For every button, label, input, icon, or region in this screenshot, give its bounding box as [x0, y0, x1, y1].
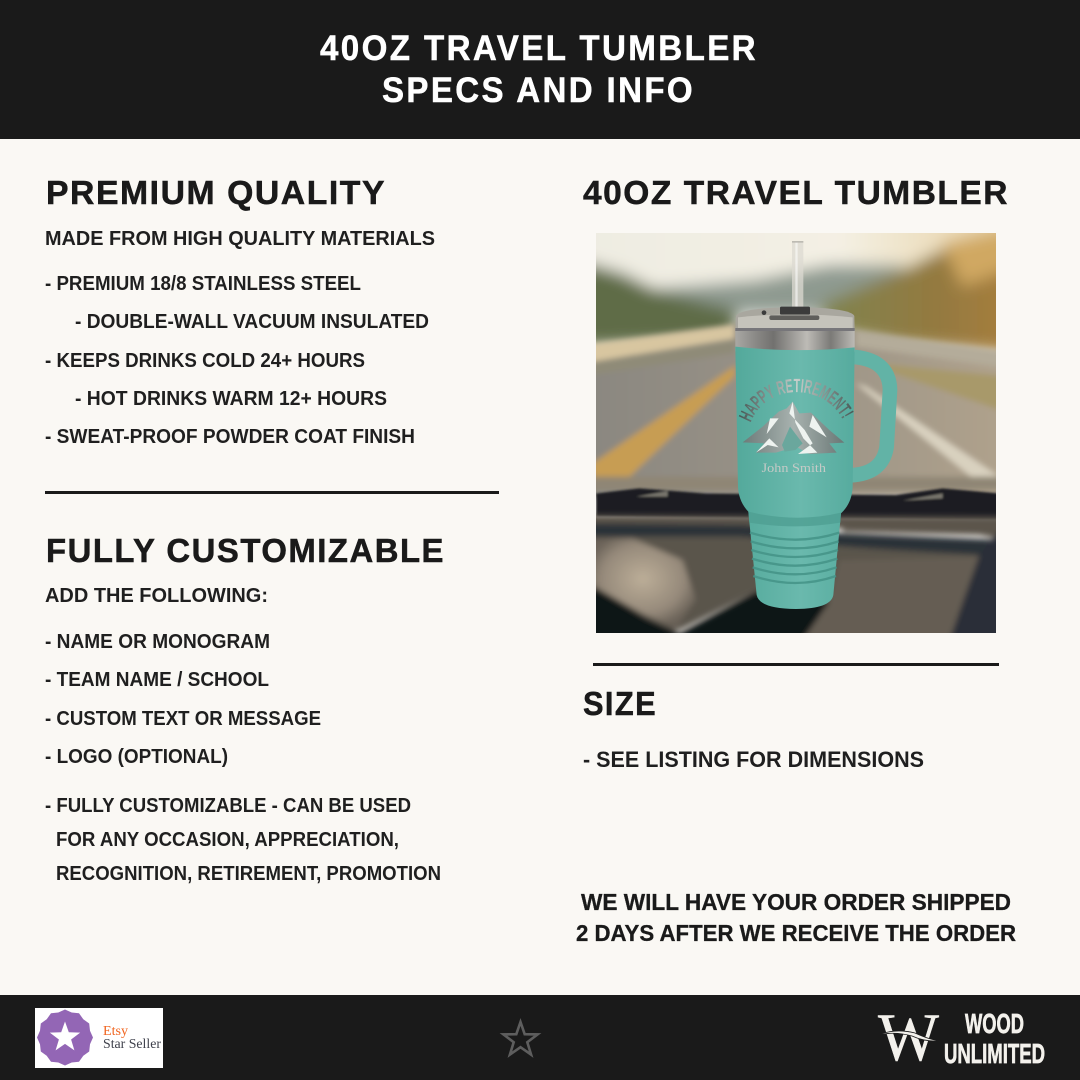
base ribs [750, 533, 839, 583]
engraving: mountains [743, 402, 844, 454]
icon: purple seal with star [37, 1010, 93, 1066]
text block: customization options [45, 585, 321, 768]
text block: premium quality list: - KEEPS DRINKS COLD 24+ HOURS [45, 350, 365, 372]
engraving: happy retirement: HAPPY RETIREMENT! [738, 378, 854, 422]
panel: size [583, 685, 924, 772]
heading: fully customizable: FULLY CUSTOMIZABLE [46, 532, 445, 569]
text block: customization options: ADD THE FOLLOWING: [45, 585, 268, 607]
logo: Wood Unlimited [878, 999, 1045, 1075]
lid [735, 307, 855, 352]
icon: star outline [503, 1022, 538, 1055]
panel: premium quality [45, 174, 435, 448]
road scene background [596, 233, 996, 633]
heading: product name: 40OZ TRAVEL TUMBLER [583, 174, 1009, 211]
text block: premium quality list: - PREMIUM 18/8 STAINLESS STEEL [45, 273, 361, 295]
tumbler body [735, 347, 855, 609]
text block: size note: - SEE LISTING FOR DIMENSIONS [583, 747, 924, 772]
text block: occasions: RECOGNITION, RETIREMENT, PROMOTION [56, 863, 441, 885]
header banner [0, 0, 1080, 139]
text: Etsy: Etsy [103, 1024, 128, 1039]
handle [850, 357, 890, 475]
title: 40OZ TRAVEL TUMBLER [320, 29, 758, 68]
callout: shipping note: 2 DAYS AFTER WE RECEIVE THE ORDER [576, 920, 1016, 946]
text block: occasions: - FULLY CUSTOMIZABLE - CAN BE USED [45, 795, 411, 817]
base shading [748, 512, 841, 526]
text: Star Seller: Star Seller [103, 1037, 161, 1052]
logo mark: W with swoosh: W [878, 999, 940, 1075]
text block: occasions: FOR ANY OCCASION, APPRECIATION, [56, 829, 399, 851]
callout: shipping note [576, 889, 1016, 946]
text block: premium quality list: - DOUBLE-WALL VACUUM INSULATED [75, 311, 429, 333]
title: SPECS AND INFO [382, 71, 695, 110]
badge: Etsy Star Seller [35, 1008, 163, 1068]
heading: premium quality: PREMIUM QUALITY [46, 174, 386, 211]
logo text: WOOD [965, 1008, 1024, 1039]
dashboard [596, 488, 999, 520]
logo text [944, 1008, 1045, 1069]
title [320, 29, 758, 110]
straw [792, 241, 804, 307]
product photo: tumbler on car dashboard [596, 233, 996, 633]
text block: customization options: - CUSTOM TEXT OR MESSAGE [45, 708, 321, 730]
text block: premium quality list [45, 228, 435, 448]
footer bar [0, 995, 1080, 1080]
text block: premium quality list: - SWEAT-PROOF POWDER COAT FINISH [45, 426, 415, 448]
engraving: name: John Smith [762, 461, 826, 475]
text block: premium quality list: - HOT DRINKS WARM 12+ HOURS [75, 388, 387, 410]
callout: shipping note: WE WILL HAVE YOUR ORDER SHIPPED [581, 889, 1011, 915]
tumbler [735, 241, 898, 609]
panel: fully customizable [45, 532, 445, 885]
text block: premium quality list: MADE FROM HIGH QUALITY MATERIALS [45, 228, 435, 250]
text block: customization options: - TEAM NAME / SCHOOL [45, 669, 269, 691]
text block: customization options: - LOGO (OPTIONAL) [45, 746, 228, 768]
text block: occasions [45, 795, 441, 885]
text block: customization options: - NAME OR MONOGRAM [45, 631, 270, 653]
heading: size: SIZE [583, 685, 657, 722]
